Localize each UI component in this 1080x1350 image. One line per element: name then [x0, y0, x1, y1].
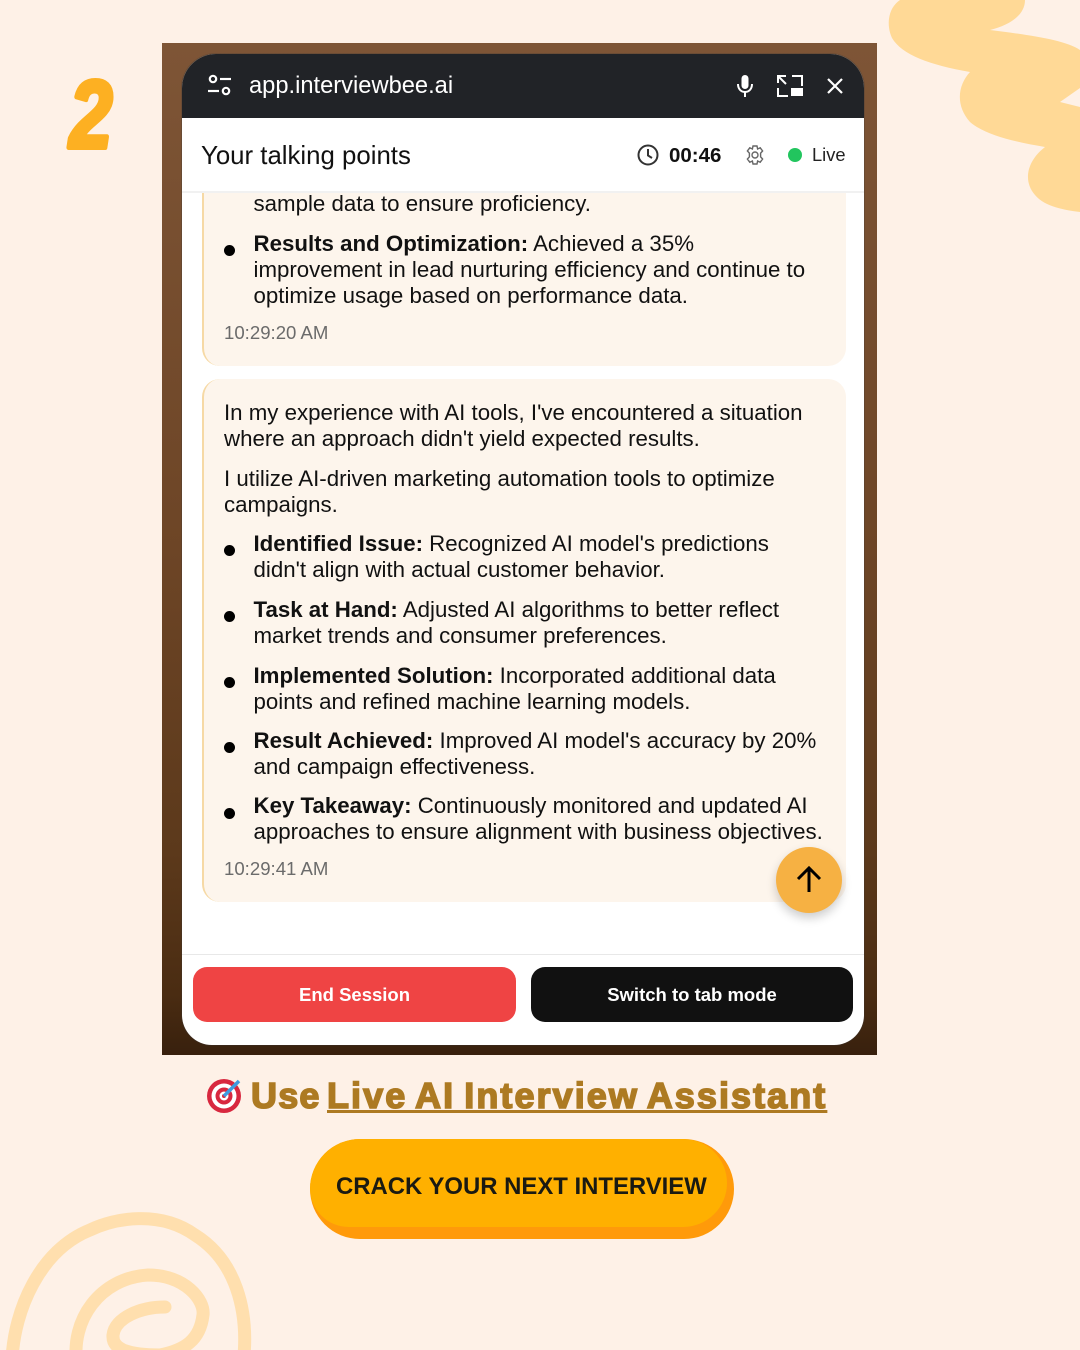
headline: Use — [251, 1075, 321, 1116]
answer text: In my experience with AI tools, I've encountered a situation — [224, 400, 803, 425]
answer text continued: 10:29:20 AM — [224, 322, 328, 343]
timer: 00:46 — [669, 144, 721, 167]
live label: Live — [812, 144, 846, 165]
answer text: 10:29:41 AM — [224, 858, 328, 879]
button: call to action: CRACK YOUR NEXT INTERVIEW — [336, 1173, 707, 1200]
answer text: Implemented Solution: Incorporated additional data — [254, 663, 776, 688]
answer text continued — [224, 191, 805, 343]
answer text: Result Achieved: Improved AI model's accuracy by 20% — [254, 728, 816, 753]
answer text continued: Results and Optimization: Achieved a 35% — [254, 231, 694, 256]
button: switch to tab mode — [531, 967, 853, 1022]
answer text continued: optimize usage based on performance data. — [254, 283, 688, 308]
icon: target — [207, 1079, 241, 1113]
header divider — [182, 191, 864, 193]
icon: clock — [638, 144, 658, 166]
app window — [182, 54, 864, 1045]
browser bar — [182, 54, 864, 118]
decorative spiral: bottom left — [6, 1212, 252, 1350]
answer text: Key Takeaway: Continuously monitored and updated AI — [254, 793, 808, 818]
answer text: campaigns. — [224, 492, 338, 517]
headline: Live AI Interview Assistant — [327, 1075, 827, 1116]
answer text: Identified Issue: Recognized AI model's predictions — [254, 531, 769, 556]
answer text: market trends and consumer preferences. — [254, 623, 667, 648]
answer text: Task at Hand: Adjusted AI algorithms to better reflect — [254, 597, 779, 622]
button: end session — [193, 967, 516, 1022]
answer text: didn't align with actual customer behavior. — [254, 557, 665, 582]
icon: controls — [208, 74, 231, 96]
answer text: approaches to ensure alignment with business objectives. — [254, 819, 823, 844]
live indicator — [788, 148, 802, 162]
button: switch to tab mode: Switch to tab mode — [607, 984, 777, 1005]
header title: Your talking points — [201, 142, 411, 170]
card: previous answer — [202, 193, 846, 366]
answer text: and campaign effectiveness. — [254, 754, 535, 779]
answer text — [224, 400, 823, 879]
answer text: I utilize AI-driven marketing automation tools to optimize — [224, 466, 775, 491]
footer divider — [182, 954, 864, 955]
icon: microphone — [737, 75, 753, 97]
screenshot frame — [162, 43, 877, 1055]
url: app.interviewbee.ai — [249, 73, 453, 99]
scroll to top button — [776, 847, 842, 913]
card: current answer — [202, 379, 846, 902]
icon: settings — [746, 145, 764, 165]
answer text continued: improvement in lead nurturing efficiency and continue to — [254, 257, 805, 282]
answer text continued: sample data to ensure proficiency. — [254, 191, 591, 216]
icon: picture in picture — [777, 75, 803, 97]
answer text: points and refined machine learning models. — [254, 689, 690, 714]
decorative scribble: top right — [888, 0, 1080, 212]
button: end session: End Session — [299, 984, 410, 1005]
icon: close — [827, 78, 843, 94]
answer text: where an approach didn't yield expected results. — [224, 426, 700, 451]
button: call to action — [310, 1139, 734, 1239]
